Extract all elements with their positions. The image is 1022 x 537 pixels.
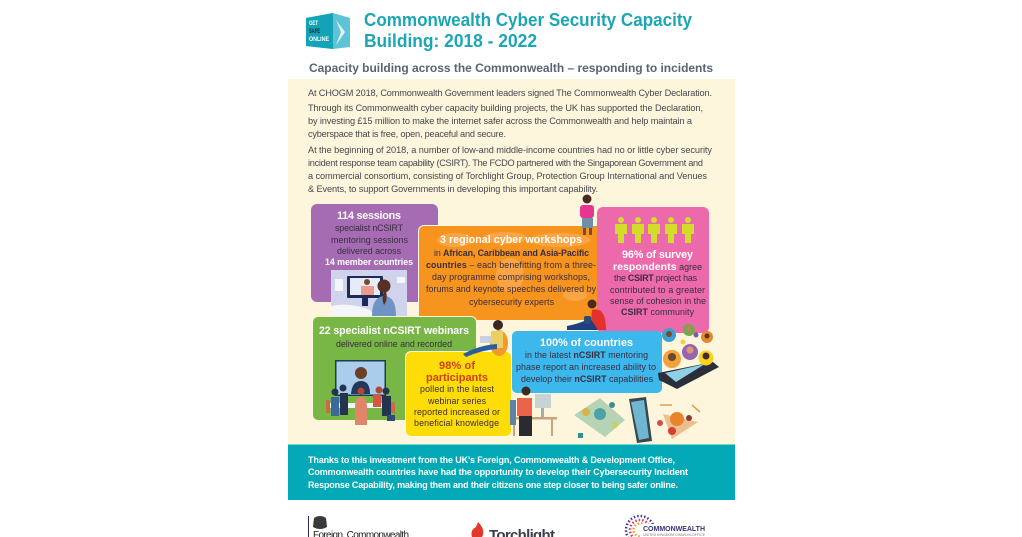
panel: blue countries card [512,331,662,393]
decorative map [437,232,590,301]
intro text: incident response team capability (CSIRT). The FCDO partnered with the Singaporean Government and [308,158,703,168]
logo: Foreign, Commonwealth [308,516,409,537]
heading: 3 regional cyber workshops: 3 regional cyber workshops [440,234,582,246]
intro text: At the beginning of 2018, a number of low-and middle-income countries had no or little cyber security [308,145,712,155]
panel: green webinars card [312,316,477,425]
orange card text: in African, Caribbean and Asia-Pacific [434,248,589,258]
panel: pink survey card [597,207,709,333]
illustration: network and smartphone [574,397,700,443]
logo: Get Safe Online: ONLINE [309,36,330,43]
blue card text: develop their nCSIRT capabilities [521,374,654,384]
logo: Get Safe Online [306,13,350,49]
panel: yellow participants card [405,351,512,437]
intro text: cyberspace that is free, open, peaceful and secure. [308,129,506,139]
purple card text [325,223,413,267]
title: Building: 2018 - 2022 [364,30,537,51]
heading: 114 sessions: 114 sessions [337,210,401,222]
subtitle: Capacity building across the Commonwealth – responding to incidents [309,61,713,75]
title [364,9,693,51]
yellow card text: beneficial knowledge [414,418,499,428]
panel: orange workshops card [418,225,604,321]
logo: Torchlight [472,522,555,537]
pink card text: respondents agree [613,261,702,273]
panel: cream background [288,79,735,445]
purple card text: mentoring sessions [331,235,409,245]
blue card text: in the latest nCSIRT mentoring [525,350,648,360]
blue card text [516,350,656,384]
illustration: man at desk [510,386,557,436]
icon: five people [615,217,694,243]
orange card text: countries – each benefitting from a three- [426,260,596,270]
pink card text: 96% of survey [622,249,693,261]
intro text [308,88,712,194]
panel: purple sessions card [311,204,438,316]
intro text: & Events, to support Governments in developing this important capability. [308,184,598,194]
yellow card text: polled in the latest [420,384,495,394]
conclusion text: Response Capability, making them and their citizens one step closer to being safer online. [308,480,678,490]
conclusion text [308,455,688,490]
illustration: video call [331,270,407,316]
logo: Get Safe Online: GET [309,20,318,27]
orange card text [426,248,597,307]
illustration: video meeting [326,360,395,425]
yellow card heading: participants [426,372,488,384]
yellow card heading: 98% of [439,360,475,372]
pink card text: sense of cohesion in the [610,296,706,306]
illustration: person on beanbag with laptop [463,320,508,357]
conclusion text: Commonwealth countries have had the opportunity to develop their Cybersecurity Incident [308,467,688,477]
heading: 22 specialist nCSIRT webinars: 22 specialist nCSIRT webinars [319,325,469,337]
green card subtext: delivered online and recorded [336,339,452,349]
logo: Commonwealth UK chair-in-office: UNITED KINGDOM CHAIR-IN-OFFICE [643,533,706,537]
purple card text: 14 member countries [325,257,413,267]
purple card text: delivered across [337,246,402,256]
illustration: phone with faces [658,324,719,389]
pink card text: the CSIRT project has [614,273,698,283]
orange card text: day programme comprising workshops, [432,272,590,282]
conclusion text: Thanks to this investment from the UK's Foreign, Commonwealth & Development Office, [308,455,675,465]
pink card text: contributed to a greater [610,285,705,295]
intro text: a commercial consortium, consisting of Torchlight Group, Protection Group International and Venues [308,171,707,181]
yellow card heading [426,360,488,384]
logo: Commonwealth UK chair-in-office: COMMONWEALTH [643,526,705,533]
purple card text: specialist nCSIRT [335,223,404,233]
intro text: by investing £15 million to make the internet safer across the Commonwealth and help maintain a [308,116,693,126]
intro text: At CHOGM 2018, Commonwealth Government leaders signed The Commonwealth Cyber Declaration. [308,88,712,98]
yellow card text: webinar series [427,396,487,406]
illustration: seated person in red hoodie [567,300,606,330]
orange card text: forums and keynote speeches delivered by [426,284,597,294]
logo: Commonwealth UK chair-in-office [626,516,711,537]
heading: 100% of countries: 100% of countries [540,337,633,349]
orange card text: cybersecurity experts [469,297,555,307]
intro text: Through its Commonwealth cyber capacity building projects, the UK has supported the Declaration, [308,103,703,113]
pink card text: CSIRT community [621,307,695,317]
blue card text: phase report an increased ability to [516,362,656,372]
title: Commonwealth Cyber Security Capacity [364,9,693,30]
pink card text [610,249,706,317]
yellow card text: reported increased or [414,407,500,417]
panel: teal conclusion band [288,444,735,500]
logo: Get Safe Online: SAFE [309,28,320,35]
illustration: standing woman with pink top [580,194,594,235]
yellow card text [414,384,500,428]
